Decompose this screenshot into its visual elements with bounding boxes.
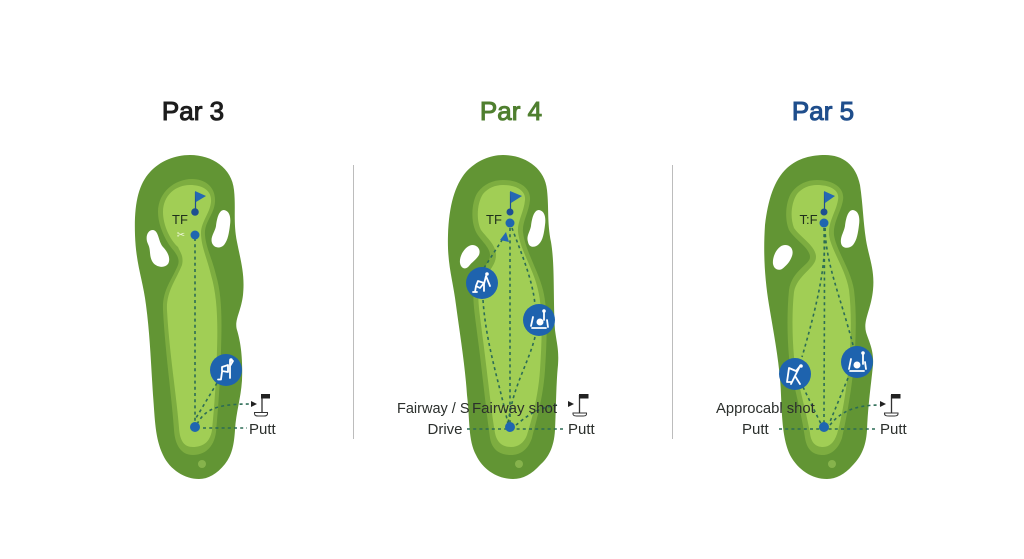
panel: par 5 hole — [716, 155, 908, 479]
fairway and green — [163, 185, 217, 447]
rough — [764, 155, 873, 479]
fairway surround — [472, 180, 547, 455]
dot: tee — [190, 230, 200, 240]
fairway and green — [792, 185, 851, 447]
label: Fairway shot: Fairway shot — [472, 400, 558, 417]
label: Fairway / S: Fairway / S — [397, 401, 470, 417]
icon: golfer — [210, 354, 242, 386]
icon: golfer — [466, 267, 498, 299]
label: Approcabl shot: Approcabl shot — [716, 401, 815, 417]
arrowhead: fairway — [500, 232, 509, 242]
shot lines — [779, 228, 880, 429]
icon: hole flag — [573, 394, 588, 416]
title: Par 3: Par 3 — [162, 96, 224, 126]
sand bunkers — [460, 210, 545, 268]
label: Putt: Putt — [249, 421, 277, 438]
scissors mark: ✂ — [177, 230, 185, 241]
dot: start — [819, 422, 829, 432]
label: Putt: Putt — [568, 421, 596, 438]
dot: start — [505, 422, 515, 432]
panel: par 3 hole — [135, 155, 277, 479]
sand bunkers — [773, 210, 859, 270]
rough — [135, 155, 244, 479]
label: Drive: Drive — [428, 421, 463, 438]
flag pin — [191, 191, 206, 216]
shot lines — [467, 228, 566, 429]
title: Par 4: Par 4 — [480, 96, 542, 126]
icon: golfer with ball — [523, 304, 555, 336]
label: TF: T:F — [800, 212, 818, 227]
icon: golfer — [779, 358, 811, 390]
flag pin — [506, 191, 522, 216]
tee marker — [828, 460, 836, 468]
icon: golfer with ball — [841, 346, 873, 378]
sand bunkers — [147, 210, 230, 267]
shot lines — [195, 238, 250, 428]
arrowhead — [880, 401, 886, 407]
label: Putt right: Putt — [880, 421, 908, 438]
label: TF: TF — [172, 212, 188, 227]
tee marker — [198, 460, 206, 468]
title: Par 5: Par 5 — [792, 96, 854, 126]
arrowhead — [251, 401, 257, 407]
icon: hole flag — [254, 394, 270, 416]
dot: tee — [506, 218, 514, 228]
fairway surround — [786, 180, 856, 455]
panel: par 4 hole — [397, 155, 596, 479]
fairway and green — [478, 185, 542, 447]
flag pin — [820, 191, 835, 216]
label: Putt left: Putt — [742, 421, 770, 438]
label: TF: TF — [486, 212, 502, 227]
icon: hole flag — [884, 394, 900, 416]
tee marker — [515, 460, 523, 468]
dot: tee — [820, 218, 828, 228]
rough — [448, 155, 558, 479]
arrowhead — [568, 401, 574, 407]
fairway surround — [158, 179, 221, 455]
dot: start — [190, 422, 200, 432]
